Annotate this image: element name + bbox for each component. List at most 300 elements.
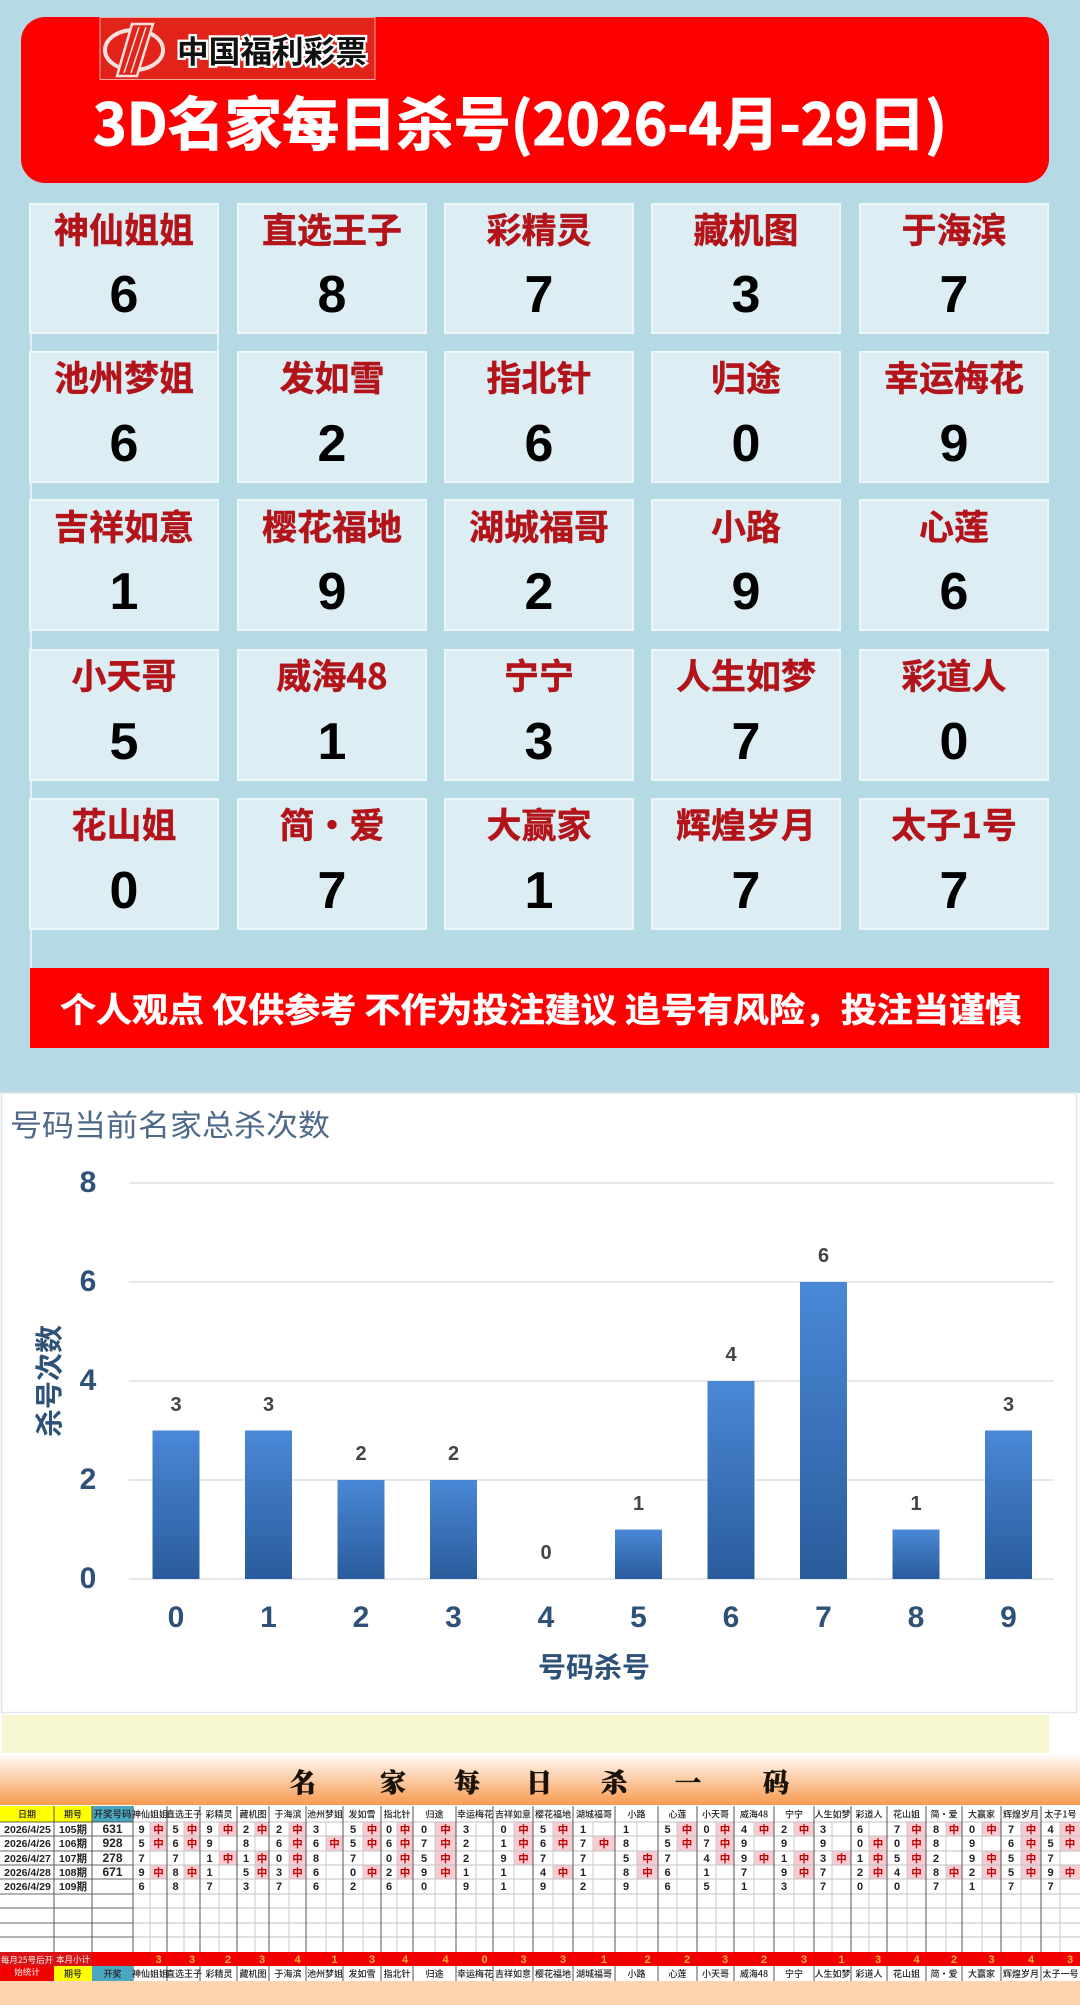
column: 彩精灵: 中 — [223, 1851, 233, 1866]
chart title: 号码当前名家总杀次数 — [10, 1101, 330, 1145]
column: 太子1号 — [1044, 1808, 1080, 1893]
card row 1: 8 — [318, 266, 346, 324]
card row 4: 5 — [110, 713, 138, 771]
monthly subtotal row: 4 — [294, 1954, 301, 1966]
bar value labels: 2 — [355, 1443, 367, 1465]
table footer row: 彩道人 — [855, 1967, 883, 1980]
column: 宁宁: 中 — [799, 1822, 809, 1837]
card row 1: 6 — [110, 266, 138, 324]
card row 3 — [30, 500, 1048, 630]
y axis ticks: 8 — [80, 1166, 96, 1199]
column: 于海滨: 2 — [276, 1824, 282, 1836]
column: 太子1号: 中 — [1065, 1865, 1075, 1880]
table title: 每 — [454, 1763, 480, 1800]
panel: table title band — [0, 1753, 1080, 1805]
card row 5 — [30, 798, 1048, 929]
column: 小路: 小路 — [627, 1808, 646, 1820]
column: 小路: 9 — [623, 1881, 629, 1893]
column: 归途: 0 — [421, 1824, 427, 1836]
bar value labels: 2 — [448, 1443, 459, 1465]
column: 大赢家: 2 — [969, 1867, 975, 1879]
column: 宁宁: 中 — [799, 1865, 809, 1880]
column: 彩精灵: 1 — [206, 1867, 213, 1879]
card row 5: 7 — [318, 862, 346, 920]
panel: bar chart — [2, 1093, 1076, 1712]
column: 樱花福地: 樱花福地 — [535, 1808, 571, 1820]
card row 5: 简•爱 — [279, 798, 385, 849]
column: 于海滨: 中 — [292, 1836, 303, 1851]
column: 彩道人: 1 — [857, 1853, 863, 1865]
table footer row: 于海滨 — [274, 1967, 302, 1980]
column: 于海滨: 于海滨 — [274, 1808, 302, 1820]
column: 小天哥: 中 — [720, 1836, 730, 1851]
column: 樱花福地: 中 — [558, 1836, 568, 1851]
card row 5: 大赢家 — [486, 798, 592, 849]
column: 吉祥如意: 中 — [518, 1851, 529, 1866]
column: 大赢家: 中 — [986, 1865, 997, 1880]
column: 樱花福地: 5 — [540, 1824, 546, 1836]
column: 简•爱 — [930, 1808, 962, 1893]
y axis title: 杀号次数 — [28, 1325, 68, 1437]
monthly subtotal row: 始统计 — [14, 1966, 40, 1978]
column: 人生如梦: 3 — [820, 1853, 826, 1865]
column: 小路: 中 — [642, 1865, 653, 1880]
column: 小天哥: 中 — [720, 1822, 730, 1837]
column: 指北针: 中 — [400, 1865, 410, 1880]
monthly subtotal row: 2 — [951, 1954, 957, 1966]
table footer row: 简•爱 — [930, 1967, 958, 1980]
column: 直选王子: 8 — [172, 1867, 179, 1879]
x axis ticks: 5 — [630, 1601, 647, 1634]
column: 简•爱: 8 — [933, 1824, 939, 1836]
date and issue rows: 2026/4/27 — [4, 1853, 51, 1865]
column: 于海滨 — [274, 1808, 306, 1893]
monthly subtotal row: 2 — [225, 1954, 231, 1966]
table footer row: 辉煌岁月 — [1003, 1967, 1039, 1980]
column: 指北针: 指北针 — [383, 1808, 411, 1820]
column: 吉祥如意: 1 — [500, 1867, 507, 1879]
bar value labels: 3 — [170, 1394, 182, 1416]
column: 神仙姐姐: 中 — [153, 1865, 164, 1880]
column: 威海48: 中 — [759, 1851, 769, 1866]
card row 1: 7 — [525, 266, 553, 324]
column: 发如雪: 发如雪 — [348, 1808, 376, 1820]
column: 湖城福哥: 1 — [580, 1824, 586, 1836]
column: 人生如梦 — [814, 1808, 851, 1893]
column: 花山姐: 5 — [894, 1853, 900, 1865]
column: 宁宁: 9 — [781, 1867, 787, 1879]
table footer row: 期号 — [64, 1967, 82, 1980]
card row 5: 0 — [110, 862, 138, 920]
table footer row — [54, 1966, 1079, 1981]
card row 2: 池州梦姐 — [54, 351, 194, 402]
monthly subtotal row: 3 — [259, 1954, 265, 1966]
card row 5: 辉煌岁月 — [676, 798, 816, 849]
bar value labels — [170, 1245, 1014, 1564]
monthly subtotal row: 3 — [875, 1954, 881, 1966]
column: 辉煌岁月: 中 — [1026, 1822, 1036, 1837]
card row 1: 藏机图 — [693, 203, 799, 254]
table footer row: 藏机图 — [239, 1967, 267, 1980]
card row 4: 小天哥 — [71, 649, 177, 700]
column: 幸运梅花: 2 — [463, 1853, 469, 1865]
column: 幸运梅花: 2 — [463, 1838, 469, 1850]
column: 吉祥如意: 中 — [518, 1836, 529, 1851]
x axis ticks: 2 — [353, 1601, 369, 1634]
column: 神仙姐姐 — [132, 1808, 168, 1893]
column: 归途: 中 — [440, 1822, 451, 1837]
column: 吉祥如意: 1 — [500, 1881, 507, 1893]
table footer row: 幸运梅花 — [457, 1967, 493, 1980]
column: 藏机图: 中 — [257, 1822, 267, 1837]
column: 人生如梦: 中 — [836, 1851, 847, 1866]
column: 宁宁 — [781, 1808, 814, 1893]
column: 樱花福地: 中 — [558, 1865, 568, 1880]
column: 简•爱: 8 — [933, 1838, 939, 1850]
column: 小天哥 — [702, 1808, 734, 1893]
column: 藏机图: 3 — [243, 1881, 249, 1893]
column: 归途: 7 — [421, 1838, 427, 1850]
card row 4: 3 — [525, 713, 553, 771]
card row 3: 樱花福地 — [262, 500, 402, 551]
column: 心莲: 中 — [682, 1822, 692, 1837]
card row 3: 1 — [110, 563, 138, 621]
column: 藏机图: 8 — [243, 1838, 249, 1850]
column: 藏机图 — [239, 1808, 269, 1893]
column: 辉煌岁月: 中 — [1026, 1865, 1036, 1880]
card row 2: 发如雪 — [279, 351, 385, 402]
column: 藏机图: 2 — [243, 1824, 249, 1836]
y axis ticks — [80, 1166, 97, 1595]
column: 池州梦姐: 3 — [313, 1824, 319, 1836]
card row 1: 神仙姐姐 — [54, 203, 194, 254]
column: 发如雪: 中 — [367, 1822, 377, 1837]
card row 2: 归途 — [711, 351, 781, 402]
date and issue rows: 2026/4/29 — [4, 1881, 51, 1893]
table footer row: 吉祥如意 — [495, 1967, 531, 1980]
column: 大赢家: 大赢家 — [968, 1808, 995, 1820]
bar value labels: 1 — [910, 1493, 922, 1515]
column: 威海48: 威海48 — [740, 1808, 768, 1820]
column: 心莲: 5 — [664, 1824, 671, 1836]
column: 太子1号: 4 — [1047, 1824, 1054, 1836]
column: 心莲: 中 — [682, 1836, 692, 1851]
card row 1: 直选王子 — [262, 203, 402, 254]
column: 于海滨: 6 — [276, 1838, 282, 1850]
panel: expert kill-number cards — [30, 203, 1048, 968]
column: 樱花福地: 6 — [540, 1838, 546, 1850]
column: 花山姐: 中 — [911, 1822, 922, 1837]
column: 辉煌岁月: 中 — [1026, 1836, 1036, 1851]
monthly subtotal row: 3 — [155, 1954, 162, 1966]
card row 3: 9 — [318, 563, 346, 621]
column: 神仙姐姐: 中 — [153, 1836, 164, 1851]
column: 归途: 中 — [440, 1865, 451, 1880]
column: 小天哥: 中 — [720, 1851, 730, 1866]
date and issue rows: 2026/4/26 — [4, 1838, 51, 1850]
column: 于海滨: 3 — [276, 1867, 282, 1879]
table title: 家 — [380, 1763, 406, 1800]
bars — [152, 1282, 1032, 1579]
date and issue rows: 2026/4/28 — [4, 1867, 51, 1879]
monthly subtotal row: 2 — [761, 1954, 767, 1966]
column: 辉煌岁月: 6 — [1008, 1838, 1014, 1850]
table title: 一 — [675, 1763, 701, 1800]
bar value labels: 3 — [263, 1394, 274, 1416]
table footer row: 发如雪 — [348, 1967, 376, 1980]
table footer row: 归途 — [425, 1967, 444, 1980]
column: 威海48: 中 — [759, 1822, 769, 1837]
column: 大赢家: 0 — [969, 1824, 975, 1836]
monthly subtotal row: 3 — [189, 1954, 195, 1966]
logo: China Welfare Lottery: 中国福利彩票 — [177, 27, 367, 72]
card row 1: 彩精灵 — [486, 203, 592, 254]
card row 2: 指北针 — [486, 351, 592, 402]
card row 2: 6 — [110, 415, 138, 473]
column: 吉祥如意: 0 — [500, 1824, 507, 1836]
column: 大赢家: 中 — [986, 1822, 997, 1837]
column: 神仙姐姐: 中 — [153, 1822, 164, 1837]
column: 湖城福哥: 1 — [580, 1867, 586, 1879]
column: 幸运梅花: 1 — [463, 1867, 469, 1879]
column: 归途: 0 — [421, 1881, 427, 1893]
x axis ticks: 3 — [445, 1601, 462, 1634]
column: 直选王子: 6 — [172, 1838, 179, 1850]
monthly subtotal row: 1 — [601, 1954, 607, 1966]
monthly subtotal row: 4 — [1028, 1954, 1035, 1966]
column: 彩道人 — [855, 1808, 887, 1893]
column: 大赢家: 1 — [969, 1881, 975, 1893]
column: 于海滨: 7 — [276, 1881, 282, 1893]
column: 威海48 — [740, 1808, 774, 1893]
table title: 杀 — [601, 1763, 630, 1800]
x axis title: 号码杀号 — [538, 1646, 650, 1686]
table footer row: 直选王子 — [166, 1967, 202, 1980]
card row 2: 0 — [732, 415, 760, 473]
card row 2: 幸运梅花 — [884, 351, 1024, 402]
column: 彩精灵: 9 — [206, 1824, 213, 1836]
table title: 日 — [526, 1763, 552, 1800]
column: 简•爱: 中 — [949, 1822, 959, 1837]
table footer row: 心莲 — [668, 1967, 687, 1980]
monthly subtotal row: 3 — [988, 1954, 995, 1966]
column: 简•爱: 8 — [933, 1867, 939, 1879]
card row 4: 宁宁 — [504, 649, 574, 700]
column: 彩道人: 6 — [857, 1824, 863, 1836]
column: 辉煌岁月: 中 — [1026, 1851, 1036, 1866]
column: 人生如梦: 3 — [820, 1824, 826, 1836]
column: 直选王子: 中 — [187, 1836, 197, 1851]
column: 太子1号: 中 — [1065, 1836, 1075, 1851]
column: 花山姐: 0 — [894, 1838, 900, 1850]
x axis ticks — [168, 1601, 1017, 1634]
column: 彩道人: 中 — [873, 1865, 883, 1880]
y axis ticks: 6 — [80, 1265, 96, 1298]
date and issue rows: 2026/4/25 — [4, 1824, 51, 1836]
card row 2: 6 — [525, 415, 553, 473]
table footer row: 大赢家 — [968, 1967, 995, 1980]
peach bottom strip — [0, 1981, 1080, 2005]
monthly subtotal row: 3 — [801, 1954, 807, 1966]
date and issue rows: 109期 — [59, 1880, 87, 1893]
column: 吉祥如意 — [495, 1808, 533, 1893]
column: 指北针: 0 — [386, 1824, 392, 1836]
column: 归途 — [421, 1808, 456, 1893]
card row 1 — [30, 203, 1048, 333]
monthly subtotal row: 3 — [1067, 1954, 1073, 1966]
disclaimer banner: 个人观点 仅供参考 不作为投注建议 追号有风险，投注当谨慎 — [60, 983, 1021, 1032]
monthly subtotal row: 本月小计 — [56, 1954, 90, 1966]
table footer row: 宁宁 — [785, 1967, 803, 1980]
card row 4: 人生如梦 — [676, 649, 816, 700]
column: 池州梦姐: 6 — [313, 1838, 319, 1850]
column: 彩精灵 — [205, 1808, 237, 1893]
monthly subtotal row: 4 — [913, 1954, 920, 1966]
column: 直选王子: 7 — [172, 1853, 179, 1865]
disclaimer banner — [30, 968, 1049, 1048]
column: 藏机图: 中 — [257, 1851, 267, 1866]
card row 1: 3 — [732, 266, 760, 324]
column: 小路: 1 — [623, 1824, 629, 1836]
column: 池州梦姐: 6 — [313, 1881, 319, 1893]
column: 威海48: 1 — [741, 1881, 747, 1893]
table header left cells — [0, 1806, 133, 1822]
column: 简•爱: 中 — [949, 1865, 959, 1880]
column: 小天哥: 7 — [703, 1838, 710, 1850]
column: 彩道人: 0 — [857, 1838, 863, 1850]
monthly subtotal row: 1 — [331, 1954, 338, 1966]
column: 辉煌岁月 — [1003, 1808, 1041, 1893]
column: 人生如梦: 7 — [820, 1881, 826, 1893]
monthly subtotal row: 2 — [684, 1954, 690, 1966]
column: 太子1号: 9 — [1047, 1867, 1054, 1879]
column: 指北针: 6 — [386, 1838, 392, 1850]
date and issue rows: 631 — [102, 1822, 123, 1836]
x axis ticks: 8 — [908, 1601, 924, 1634]
column: 藏机图: 5 — [243, 1867, 249, 1879]
monthly subtotal row — [0, 1952, 1080, 1981]
column: 池州梦姐: 中 — [329, 1836, 340, 1851]
x axis ticks: 1 — [260, 1601, 277, 1634]
table footer row: 神仙姐姐 — [132, 1967, 168, 1980]
table header left cells: 开奖号码 — [93, 1806, 132, 1820]
column: 辉煌岁月: 辉煌岁月 — [1003, 1808, 1039, 1820]
title: 3D名家每日杀号(2026-4月-29日) — [93, 78, 947, 162]
y axis ticks: 0 — [80, 1562, 96, 1595]
column: 威海48: 4 — [741, 1824, 748, 1836]
column: 心莲 — [664, 1808, 697, 1893]
column: 花山姐: 中 — [911, 1836, 922, 1851]
column: 花山姐: 0 — [894, 1881, 900, 1893]
table footer row: 威海48 — [740, 1967, 768, 1980]
column: 辉煌岁月: 5 — [1008, 1867, 1014, 1879]
column: 直选王子: 中 — [187, 1822, 197, 1837]
table title: 名 — [290, 1763, 316, 1800]
table footer row: 人生如梦 — [814, 1967, 851, 1980]
column: 发如雪: 5 — [350, 1838, 356, 1850]
x axis ticks: 6 — [723, 1601, 739, 1634]
column: 简•爱: 7 — [933, 1881, 939, 1893]
column: 人生如梦: 9 — [820, 1838, 826, 1850]
card row 3: 心莲 — [919, 500, 989, 551]
monthly subtotal row: 3 — [520, 1954, 527, 1966]
column: 指北针: 中 — [400, 1851, 410, 1866]
column: 小路: 中 — [642, 1851, 653, 1866]
column: 花山姐: 7 — [894, 1824, 900, 1836]
column: 于海滨: 0 — [276, 1853, 282, 1865]
table footer row: 樱花福地 — [535, 1967, 571, 1980]
card row 4: 威海48 — [276, 649, 388, 700]
column: 池州梦姐: 池州梦姐 — [307, 1808, 343, 1820]
column: 吉祥如意: 1 — [500, 1838, 507, 1850]
date and issue rows: 278 — [102, 1851, 123, 1865]
column: 发如雪: 5 — [350, 1824, 356, 1836]
column: 于海滨: 中 — [292, 1851, 303, 1866]
bar value labels: 0 — [540, 1542, 552, 1564]
column: 辉煌岁月: 7 — [1008, 1824, 1014, 1836]
column: 发如雪: 0 — [350, 1867, 356, 1879]
column: 池州梦姐 — [307, 1808, 343, 1893]
column: 宁宁: 1 — [781, 1853, 787, 1865]
column: 心莲: 心莲 — [668, 1808, 687, 1820]
column: 湖城福哥: 中 — [599, 1836, 609, 1851]
column: 花山姐: 中 — [911, 1851, 922, 1866]
column: 心莲: 7 — [664, 1853, 671, 1865]
column: 小路: 8 — [623, 1838, 629, 1850]
monthly subtotal row: 0 — [481, 1954, 488, 1966]
card row 2 — [30, 351, 1048, 482]
column: 归途: 5 — [421, 1853, 427, 1865]
column: 大赢家: 9 — [969, 1838, 975, 1850]
column: 彩道人: 0 — [857, 1881, 863, 1893]
header banner — [21, 17, 1049, 183]
column: 藏机图: 藏机图 — [239, 1808, 267, 1820]
card row 4: 0 — [940, 713, 968, 771]
column: 小天哥: 4 — [703, 1853, 710, 1865]
column: 威海48: 9 — [741, 1853, 747, 1865]
table footer row: 开奖 — [103, 1967, 122, 1980]
column: 宁宁: 3 — [781, 1881, 787, 1893]
column: 归途: 中 — [440, 1836, 451, 1851]
column: 直选王子: 直选王子 — [166, 1808, 202, 1820]
column: 发如雪: 中 — [367, 1836, 377, 1851]
column: 神仙姐姐: 5 — [138, 1838, 145, 1850]
card row 5: 7 — [940, 862, 968, 920]
column: 小天哥: 1 — [703, 1867, 710, 1879]
table footer row: 太子一号 — [1042, 1967, 1079, 1980]
column: 指北针: 2 — [386, 1867, 392, 1879]
card row 3: 6 — [940, 563, 968, 621]
panel: daily kill table — [0, 1806, 1080, 1981]
column: 小天哥: 小天哥 — [702, 1808, 729, 1820]
card row 3: 湖城福哥 — [469, 500, 609, 551]
column: 简•爱: 简•爱 — [930, 1808, 958, 1820]
column: 归途: 中 — [440, 1851, 451, 1866]
column: 心莲: 5 — [664, 1838, 671, 1850]
monthly subtotal row: 3 — [369, 1954, 375, 1966]
card row 3: 9 — [732, 563, 760, 621]
column: 樱花福地: 中 — [558, 1822, 568, 1837]
column: 湖城福哥: 7 — [580, 1838, 586, 1850]
card row 3: 吉祥如意 — [54, 500, 194, 551]
column: 宁宁: 中 — [799, 1851, 809, 1866]
column: 湖城福哥 — [576, 1808, 615, 1893]
column: 太子1号: 太子1号 — [1044, 1808, 1077, 1820]
column: 幸运梅花 — [457, 1808, 493, 1893]
column: 宁宁: 9 — [781, 1838, 787, 1850]
column: 人生如梦: 7 — [820, 1867, 826, 1879]
y axis ticks: 2 — [80, 1463, 96, 1496]
